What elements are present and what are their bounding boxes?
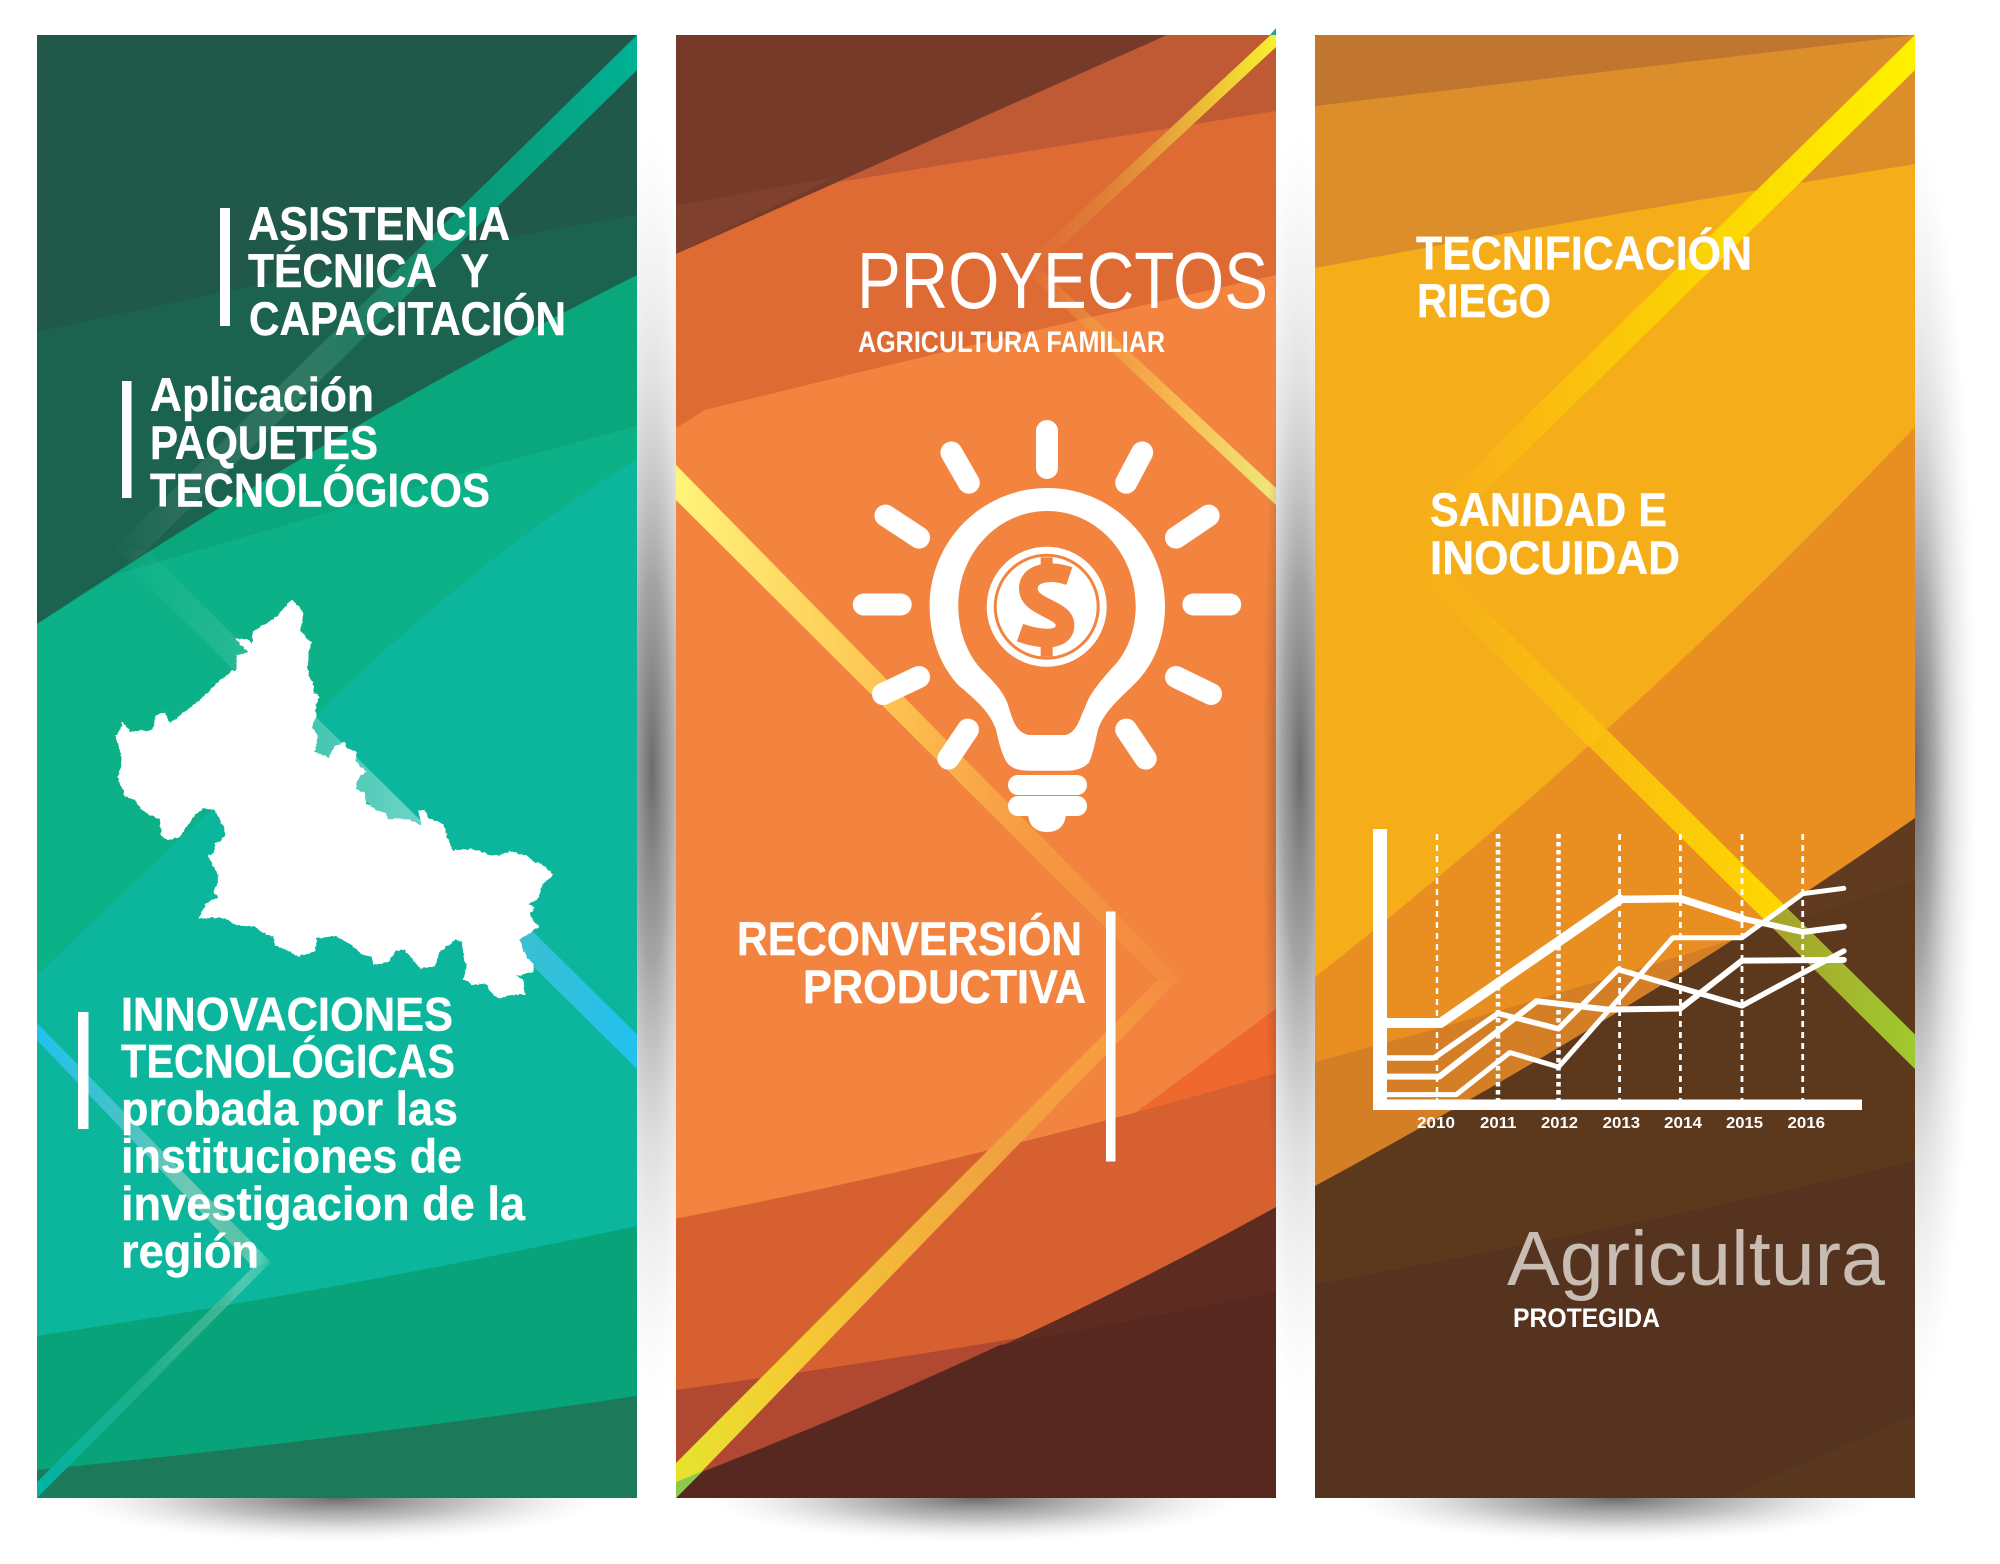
heading: tecnificacion riego bbox=[1416, 226, 1752, 327]
amber background layers bbox=[1315, 35, 1915, 1498]
heading: tecnificacion riego: TECNIFICACIÓN bbox=[1416, 226, 1752, 280]
heading: asistencia tecnica y capacitacion: TÉCNICA Y bbox=[248, 244, 489, 297]
heading: asistencia tecnica y capacitacion: CAPACITACIÓN bbox=[249, 292, 566, 345]
accent bar: reconversion bbox=[1106, 912, 1116, 1162]
heading: proyectos: PROYECTOS bbox=[857, 236, 1268, 325]
heading: asistencia tecnica y capacitacion bbox=[248, 197, 566, 345]
heading: tecnificacion riego: RIEGO bbox=[1417, 274, 1551, 327]
panel: green assistance banner bbox=[37, 35, 637, 1498]
heading: aplicacion paquetes tecnologicos bbox=[150, 368, 490, 516]
heading: aplicacion paquetes tecnologicos: Aplicación bbox=[150, 368, 374, 421]
line chart 2010-2016: 2016 bbox=[1788, 1115, 1825, 1132]
heading: reconversion productiva: RECONVERSIÓN bbox=[737, 912, 1082, 965]
text block: innovaciones tecnologicas: región bbox=[121, 1224, 259, 1278]
line chart 2010-2016: 2010 bbox=[1417, 1115, 1455, 1132]
accent bar: paquetes bbox=[122, 381, 132, 498]
panel: orange projects banner bbox=[676, 28, 1330, 1498]
text block: innovaciones tecnologicas: instituciones de bbox=[121, 1130, 462, 1182]
text block: innovaciones tecnologicas: investigacion de la bbox=[121, 1177, 526, 1230]
accent bar: innovaciones bbox=[78, 1012, 88, 1129]
line chart 2010-2016: 2015 bbox=[1726, 1115, 1763, 1132]
text block: innovaciones tecnologicas: INNOVACIONES bbox=[121, 988, 453, 1040]
green background layers bbox=[37, 35, 637, 1498]
panel: yellow technification banner bbox=[1315, 35, 1915, 1498]
text block: innovaciones tecnologicas bbox=[121, 988, 526, 1278]
heading: reconversion productiva: PRODUCTIVA bbox=[803, 960, 1086, 1013]
subheading: agricultura familiar: AGRICULTURA FAMILIAR bbox=[858, 326, 1165, 359]
subheading: protegida: PROTEGIDA bbox=[1513, 1303, 1660, 1333]
icon: region map silhouette bbox=[115, 600, 553, 998]
heading: reconversion productiva bbox=[737, 912, 1086, 1013]
line chart 2010-2016: 2011 bbox=[1480, 1115, 1517, 1132]
heading: sanidad e inocuidad: SANIDAD E bbox=[1430, 483, 1667, 536]
line chart 2010-2016: 2013 bbox=[1603, 1115, 1640, 1132]
orange background layers bbox=[676, 30, 1330, 1498]
text block: innovaciones tecnologicas: TECNOLÓGICAS bbox=[121, 1034, 455, 1088]
line chart 2010-2016: 2012 bbox=[1541, 1115, 1578, 1132]
heading: agricultura: Agricultura bbox=[1507, 1216, 1885, 1302]
line chart 2010-2016 bbox=[1373, 829, 1862, 1132]
text block: innovaciones tecnologicas: probada por las bbox=[121, 1082, 458, 1135]
heading: aplicacion paquetes tecnologicos: TECNOLÓGICOS bbox=[150, 464, 490, 516]
icon: light bulb with dollar coin bbox=[864, 431, 1230, 832]
heading: aplicacion paquetes tecnologicos: PAQUETES bbox=[150, 416, 378, 469]
corner tip bbox=[1270, 28, 1276, 35]
accent bar: asistencia bbox=[220, 208, 230, 326]
heading: sanidad e inocuidad bbox=[1430, 483, 1680, 584]
line chart 2010-2016: 2014 bbox=[1664, 1115, 1702, 1132]
heading: asistencia tecnica y capacitacion: ASISTENCIA bbox=[248, 197, 510, 250]
heading: sanidad e inocuidad: INOCUIDAD bbox=[1430, 531, 1680, 584]
